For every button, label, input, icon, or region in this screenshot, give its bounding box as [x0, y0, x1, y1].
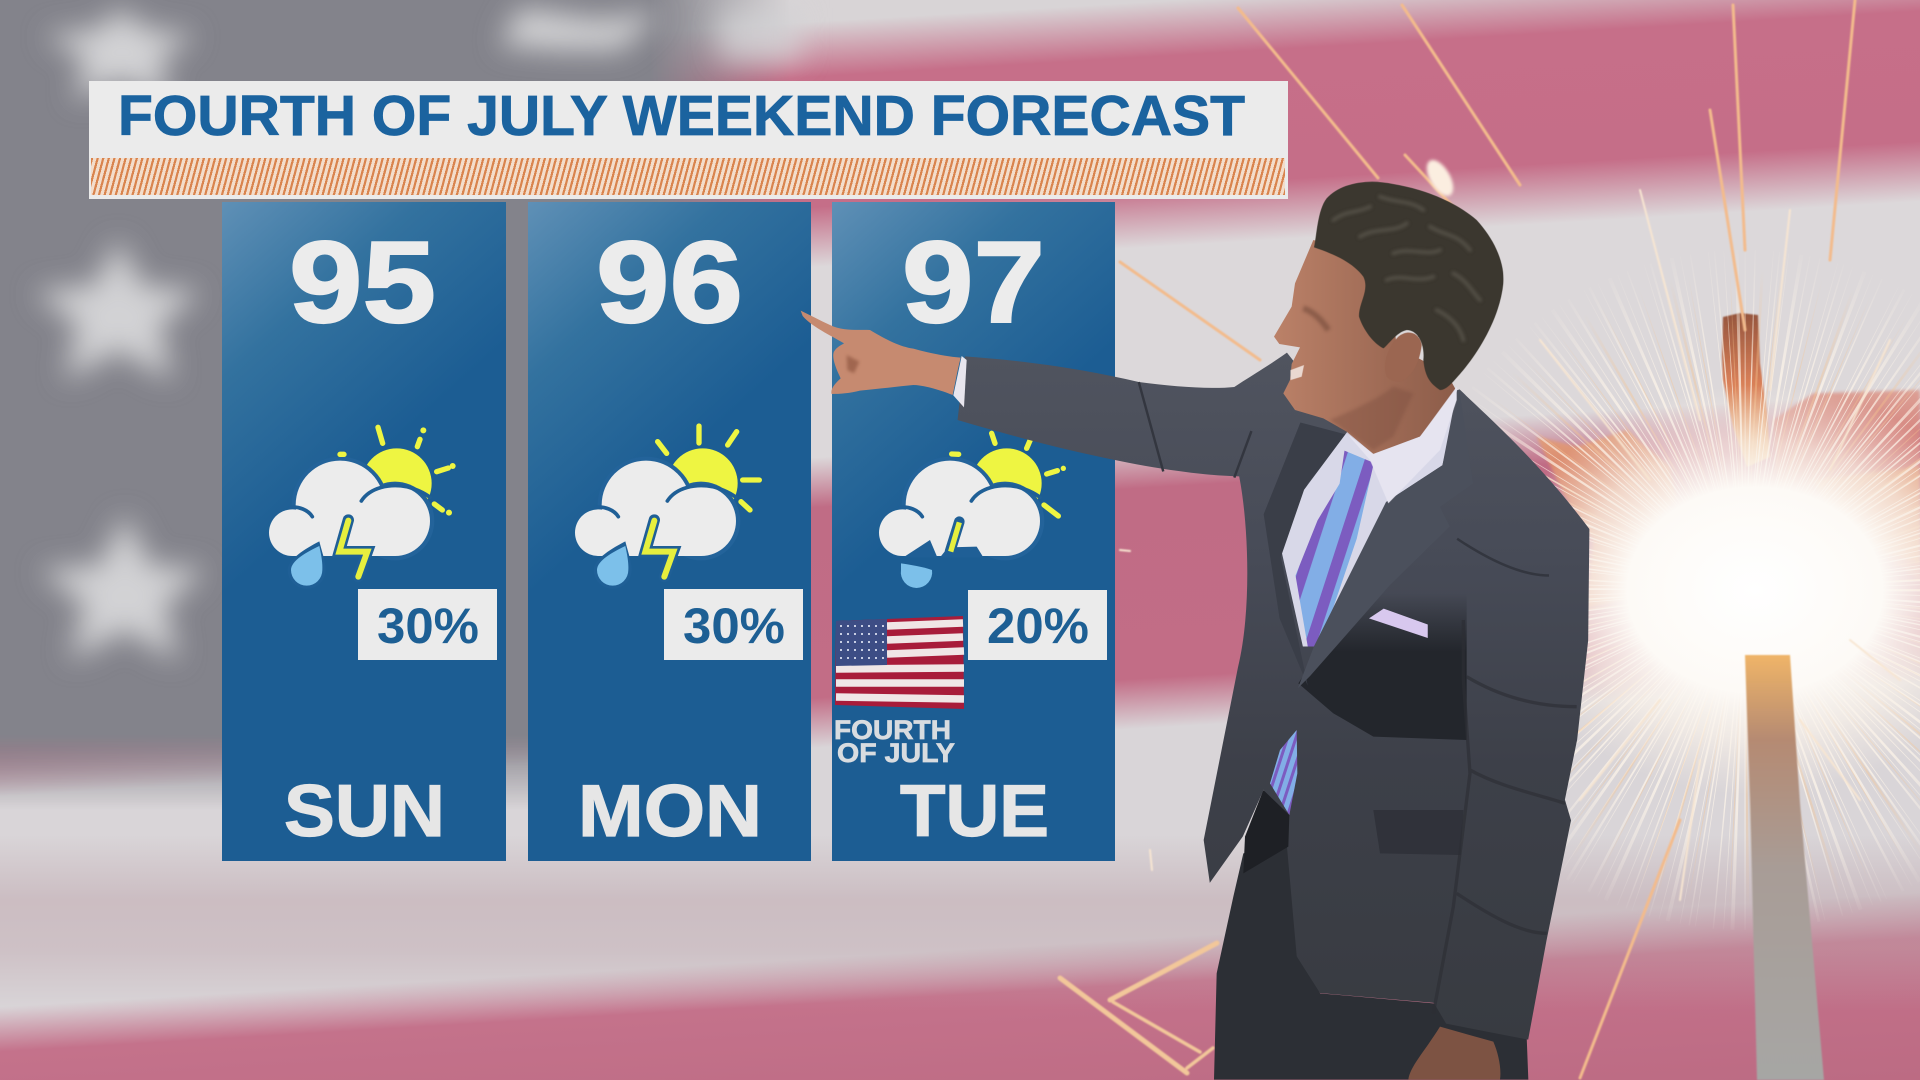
neck shadow: [1330, 387, 1413, 450]
holiday label: [834, 715, 955, 768]
rain chance: [358, 589, 497, 660]
sparkler stick: [1745, 655, 1824, 1080]
rain chance: 30%: [377, 598, 479, 654]
sleeve fold lines: [1139, 382, 1549, 576]
presenter head: [1274, 182, 1504, 503]
brow shadow: [1303, 308, 1328, 330]
title text: FOURTH OF JULY WEEKEND FORECAST: [118, 84, 1245, 148]
shirt collar: [1347, 387, 1457, 503]
finger shadow: [847, 355, 859, 373]
high temperature: 95: [289, 217, 436, 347]
tie: [1296, 451, 1374, 647]
jacket silhouette: [958, 353, 1589, 1040]
sparkler burnt tip: [1722, 313, 1770, 467]
panel: Tuesday: [832, 202, 1115, 861]
mouth: [1291, 365, 1304, 380]
panel background: [528, 202, 811, 861]
spark highlight: [1421, 156, 1459, 200]
jacket lower details: [1243, 593, 1577, 1013]
panel background: [832, 202, 1115, 861]
presenter legs: [1214, 840, 1528, 1080]
panel: Sunday: [222, 202, 506, 861]
panel: Monday: [528, 202, 811, 861]
high temperature: 96: [596, 217, 743, 347]
sparkler core glow: [1500, 385, 1920, 795]
icon: storm with sun: [269, 427, 456, 589]
rain chance: 30%: [683, 598, 785, 654]
pocket square: [1369, 609, 1428, 638]
panel background: [222, 202, 506, 861]
spark streaks: [1575, 420, 1915, 760]
neck and face: [1274, 240, 1456, 454]
hand shape: [801, 311, 961, 395]
sleeve cuff: [953, 356, 967, 407]
dark shirt gap: [1243, 790, 1289, 873]
ear: [1385, 333, 1422, 382]
left lapel: [1264, 422, 1347, 686]
pocket flap: [1373, 810, 1463, 855]
right lapel: [1298, 392, 1473, 688]
jacket interior shadow: [1298, 593, 1467, 740]
sleeve seam and folds: [1433, 620, 1577, 1013]
day label: TUE: [900, 771, 1049, 852]
title panel: [89, 81, 1288, 199]
sparkler: [1060, 0, 1920, 1080]
background: flag canton: [0, 0, 800, 820]
shirt, tie and lapels: [1139, 382, 1549, 688]
rain chance: [968, 590, 1107, 660]
hatched band: [91, 158, 1285, 195]
icon: storm with sun, partly revealed: [879, 433, 1066, 588]
holiday label: FOURTH: [834, 715, 951, 745]
icon: American flag: [835, 616, 964, 709]
jacket back and pants: [1214, 840, 1528, 1080]
rain chance: 20%: [987, 598, 1089, 654]
pointing hand: [801, 311, 967, 407]
icon: storm with sun: [575, 426, 759, 589]
holiday label: OF JULY: [837, 738, 955, 768]
hanging hand: [1408, 1027, 1500, 1080]
hair highlights: [1333, 197, 1480, 340]
rain chance: [664, 589, 803, 660]
title bar: [89, 81, 1288, 199]
day label: SUN: [284, 771, 445, 852]
hair: [1314, 182, 1504, 390]
shirt: [1282, 389, 1457, 647]
high temperature: 97: [902, 217, 1045, 347]
spark colour patches: [1537, 390, 1920, 608]
presenter: [801, 182, 1589, 1080]
day label: MON: [578, 771, 762, 852]
long spark trails: [1060, 0, 1900, 1078]
tie tail: [1270, 730, 1297, 815]
background: blurred flag stars: [35, 8, 800, 660]
